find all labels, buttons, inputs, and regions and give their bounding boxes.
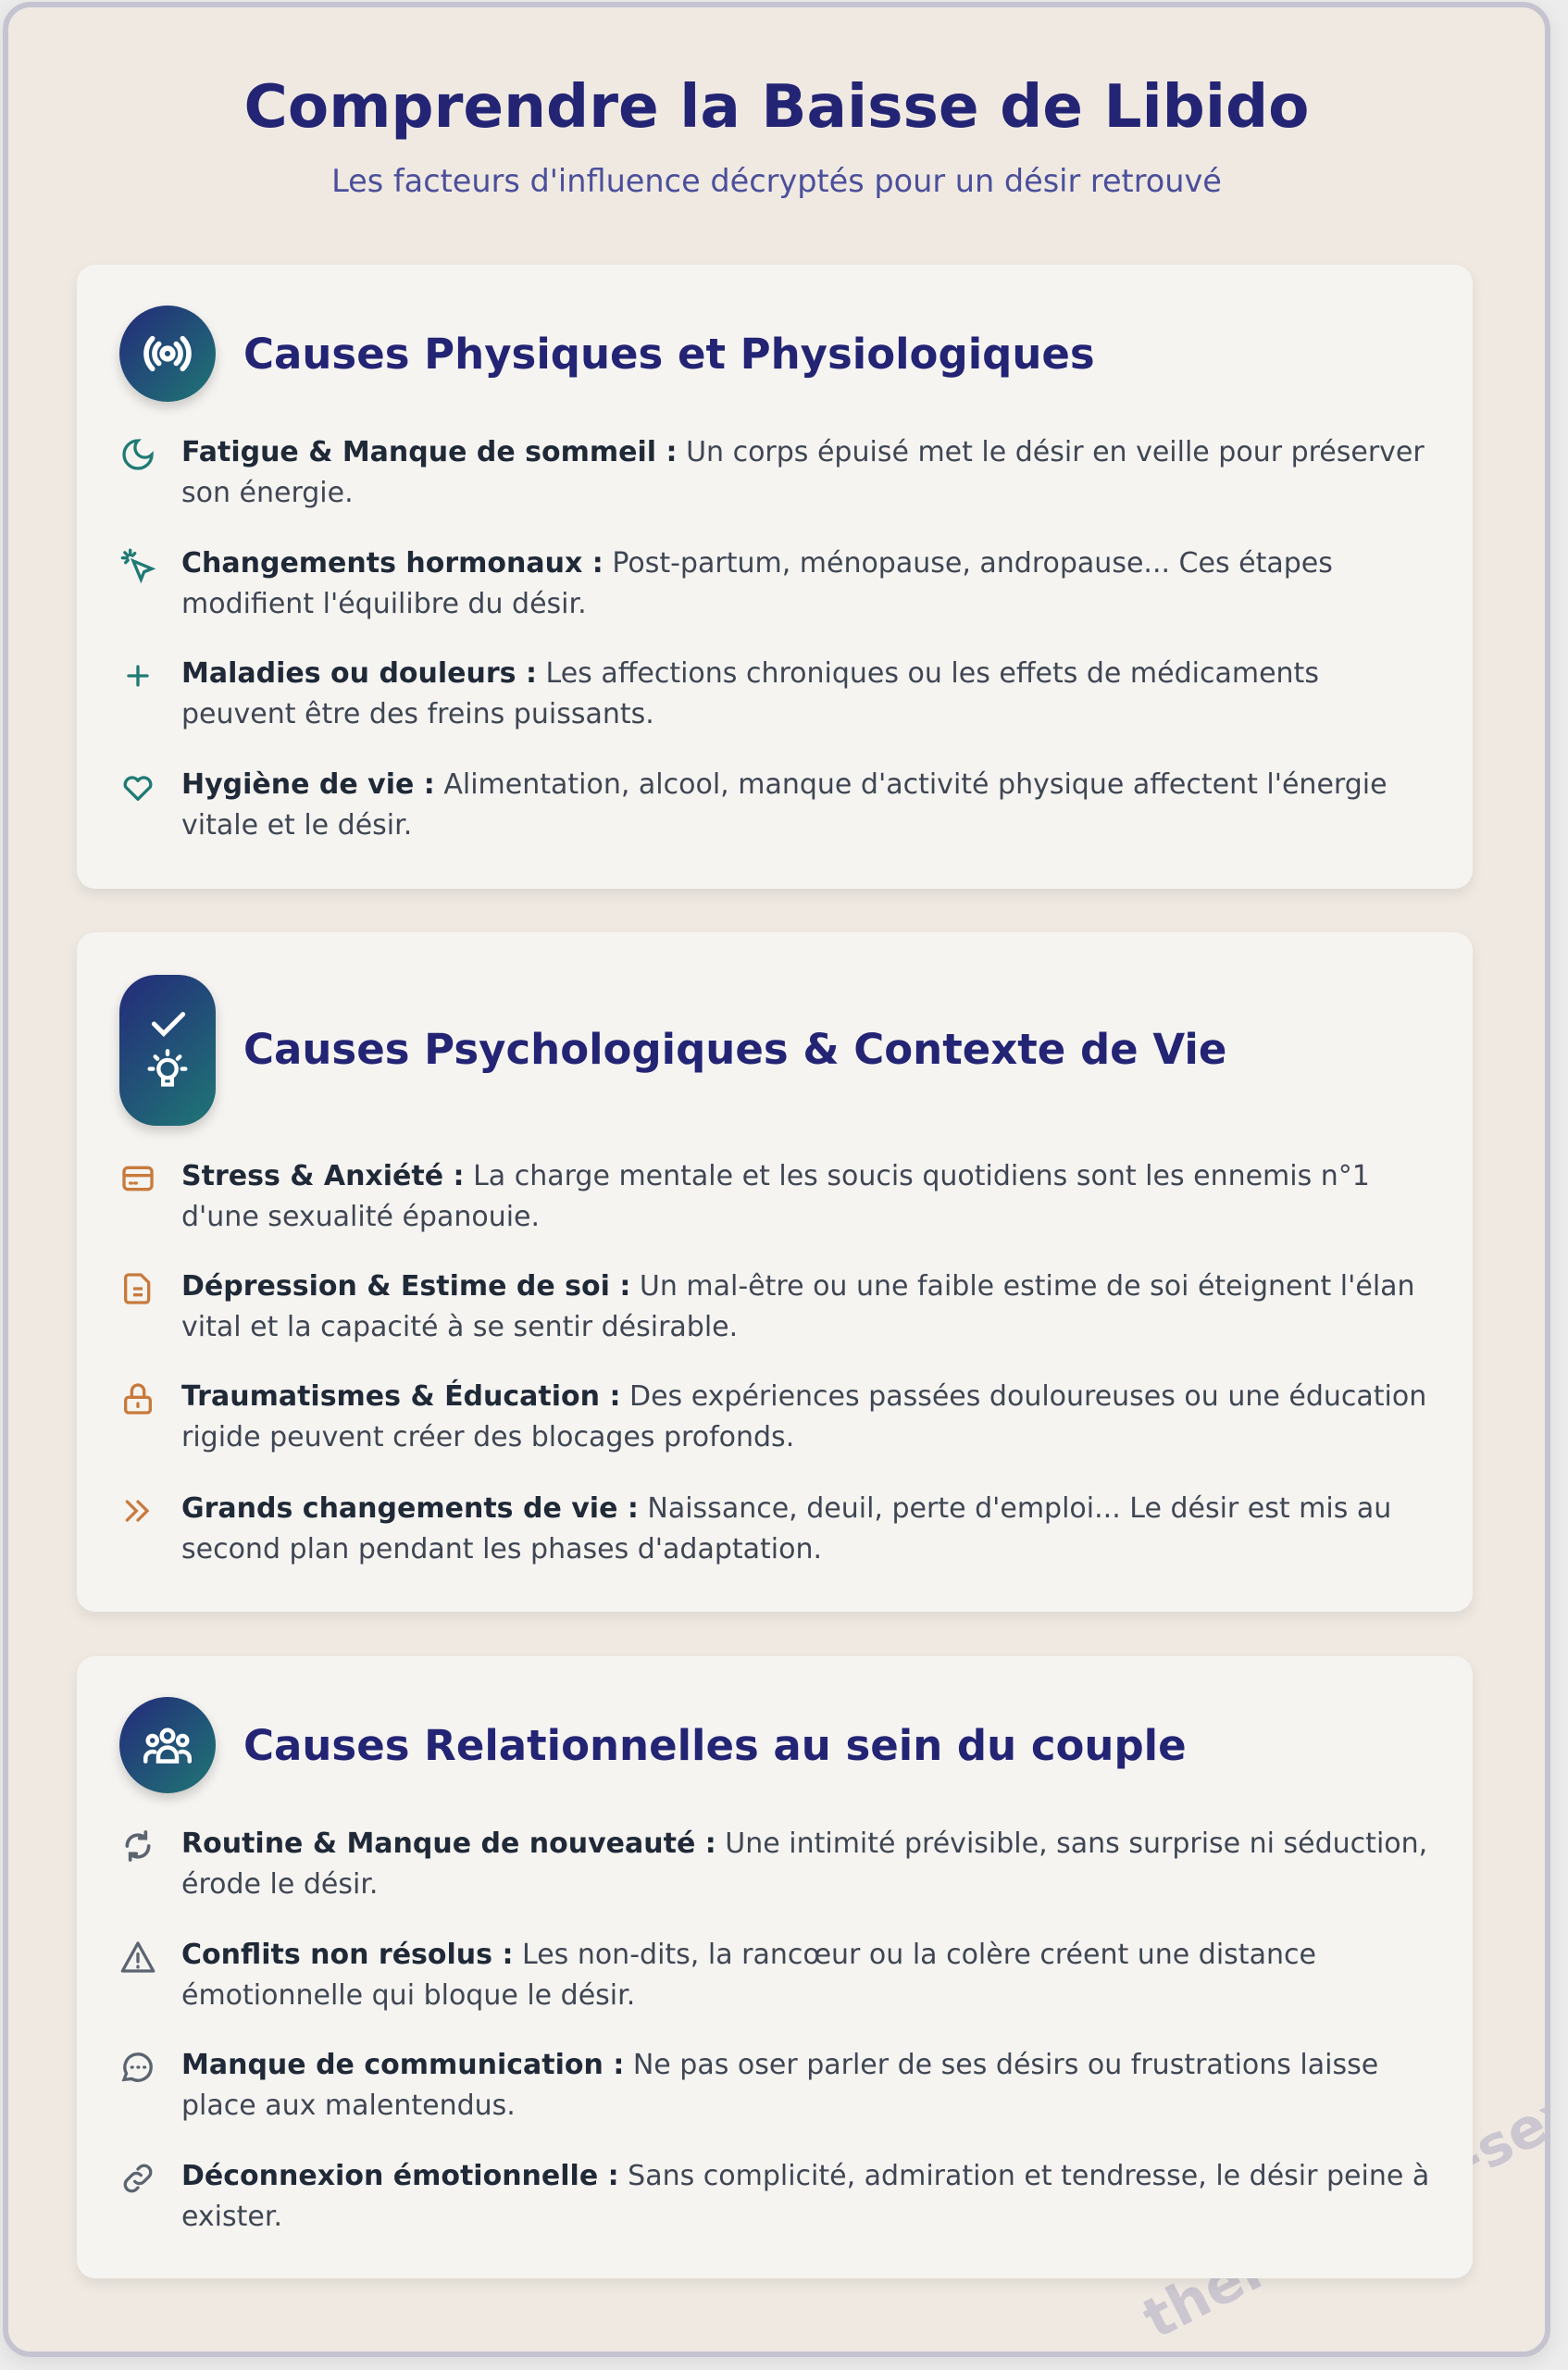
item: trauma: Traumatismes & Éducation : Des expériences passées douloureuses ou une éducation [181,1380,1426,1413]
item: communication [122,2049,1378,2122]
item: depression: Dépression & Estime de soi : Un mal-être ou une faible estime de soi éteignent l'élan [181,1270,1415,1303]
item: communication: Manque de communication : Ne pas oser parler de ses désirs ou frustrations laisse [181,2049,1378,2081]
item: disconnection [124,2160,1429,2233]
item: life changes: Grands changements de vie : Naissance, deuil, perte d'emploi... Le désir est mis au [181,1492,1391,1525]
item: lifestyle: vitale et le désir. [181,809,412,842]
item: illness [127,657,1319,730]
item: hormones [120,547,1333,620]
item: communication: place aux malentendus. [181,2089,516,2122]
item: hormones: Changements hormonaux : Post-partum, ménopause, andropause... Ces étapes [181,547,1333,580]
icon: broadcast [119,306,216,402]
heading: Causes Psychologiques & Contexte de Vie [243,1025,1226,1074]
item: stress [122,1160,1370,1233]
item: life changes [126,1492,1391,1565]
item: depression: vital et la capacité à se sentir désirable. [181,1311,738,1343]
title: Comprendre la Baisse de Libido [244,72,1309,142]
item: depression [124,1270,1415,1343]
item: illness: Maladies ou douleurs : Les affections chroniques ou les effets de médicaments [181,657,1319,690]
item: disconnection: exister. [181,2201,282,2233]
item: stress: d'une sexualité épanouie. [181,1201,540,1233]
panel: physical causes [77,265,1473,889]
item: trauma [124,1379,1426,1453]
icon: check and bulb [119,975,216,1126]
panel: psychological causes [77,932,1473,1612]
heading: Causes Physiques et Physiologiques [243,330,1095,379]
item: trauma: rigide peuvent créer des blocages profonds. [181,1421,794,1453]
item: disconnection: Déconnexion émotionnelle : Sans complicité, admiration et tendresse, le désir peine à [181,2160,1429,2192]
item: fatigue: son énergie. [181,477,354,509]
item: conflicts: Conflits non résolus : Les non-dits, la rancœur ou la colère créent une distance [181,1939,1316,1971]
item: stress: Stress & Anxiété : La charge mentale et les soucis quotidiens sont les ennemis n°1 [181,1160,1370,1192]
item: routine: Routine & Manque de nouveauté : Une intimité prévisible, sans surprise ni séduction, [181,1827,1427,1860]
item: lifestyle [124,768,1388,842]
panel: relational causes [77,1656,1473,2278]
heading: Causes Relationnelles au sein du couple [243,1721,1187,1770]
item: fatigue [122,436,1425,509]
icon: group [119,1697,216,1793]
item: fatigue: Fatigue & Manque de sommeil : Un corps épuisé met le désir en veille pour préserver [181,436,1425,468]
item: life changes: second plan pendant les phases d'adaptation. [181,1533,822,1565]
item: routine: érode le désir. [181,1868,378,1901]
item: conflicts: émotionnelle qui bloque le désir. [181,1979,635,2012]
item: hormones: modifient l'équilibre du désir. [181,588,587,620]
item: illness: peuvent être des freins puissants. [181,698,654,730]
subtitle: Les facteurs d'influence décryptés pour un désir retrouvé [331,163,1222,199]
item: lifestyle: Hygiène de vie : Alimentation, alcool, manque d'activité physique affectent l'énergie [181,768,1388,801]
item: routine [126,1827,1427,1901]
item: conflicts [120,1939,1316,2012]
